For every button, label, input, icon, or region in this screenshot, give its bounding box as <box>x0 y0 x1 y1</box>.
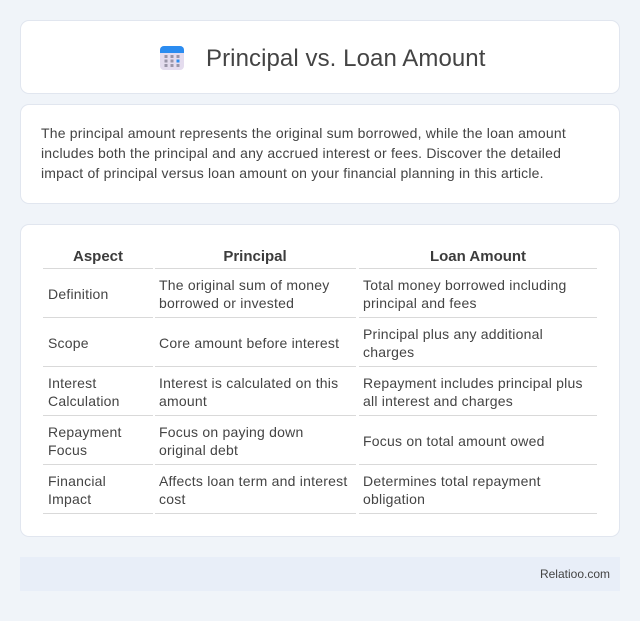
panel: title card <box>20 20 620 94</box>
icon: calendar <box>160 46 184 70</box>
row: scope: Principal plus any additional <box>363 326 543 342</box>
row: financial impact <box>43 473 597 514</box>
table header: Principal <box>223 248 287 265</box>
row: financial impact: Affects loan term and interest <box>159 473 347 489</box>
table header <box>43 248 597 269</box>
row: definition: Total money borrowed including <box>363 277 566 293</box>
row: financial impact: Impact <box>48 491 91 507</box>
row: repayment focus: Focus <box>48 442 87 458</box>
row: interest calculation: amount <box>159 393 207 409</box>
row: scope: Scope <box>48 335 89 351</box>
title: Principal vs. Loan Amount <box>206 45 486 72</box>
row: repayment focus: Repayment <box>48 424 122 440</box>
row: definition: principal and fees <box>363 295 477 311</box>
row: scope: charges <box>363 344 414 360</box>
row: interest calculation: Interest is calculated on this <box>159 375 338 391</box>
footer brand: Relatioo.com <box>540 567 610 581</box>
row: repayment focus: original debt <box>159 442 238 458</box>
row: repayment focus: Focus on paying down <box>159 424 304 440</box>
row: interest calculation: all interest and charges <box>363 393 513 409</box>
row: scope <box>43 326 597 367</box>
row: financial impact: cost <box>159 491 186 507</box>
intro text: includes both the principal and any accrued interest or fees. Discover the detailed <box>41 145 561 161</box>
row: scope: Core amount before interest <box>159 335 339 351</box>
table header: Loan Amount <box>430 248 526 265</box>
row: financial impact: Financial <box>48 473 106 489</box>
row: definition: The original sum of money <box>159 277 329 293</box>
footer bar <box>20 557 620 591</box>
row: financial impact: obligation <box>363 491 425 507</box>
row: interest calculation: Repayment includes principal plus <box>363 375 583 391</box>
intro text <box>41 125 566 181</box>
table header: Aspect <box>73 248 123 265</box>
row: interest calculation <box>43 375 597 416</box>
row: interest calculation: Interest <box>48 375 96 391</box>
row: interest calculation: Calculation <box>48 393 120 409</box>
row: definition: borrowed or invested <box>159 295 294 311</box>
intro text: The principal amount represents the original sum borrowed, while the loan amount <box>41 125 566 141</box>
panel: comparison table <box>20 224 620 537</box>
panel: introduction <box>20 104 620 204</box>
row: definition: Definition <box>48 286 109 302</box>
row: repayment focus <box>43 424 597 465</box>
intro text: impact of principal versus loan amount on your financial planning in this article. <box>41 165 544 181</box>
row: repayment focus: Focus on total amount owed <box>363 433 545 449</box>
row: financial impact: Determines total repayment <box>363 473 541 489</box>
row: definition <box>43 277 597 318</box>
